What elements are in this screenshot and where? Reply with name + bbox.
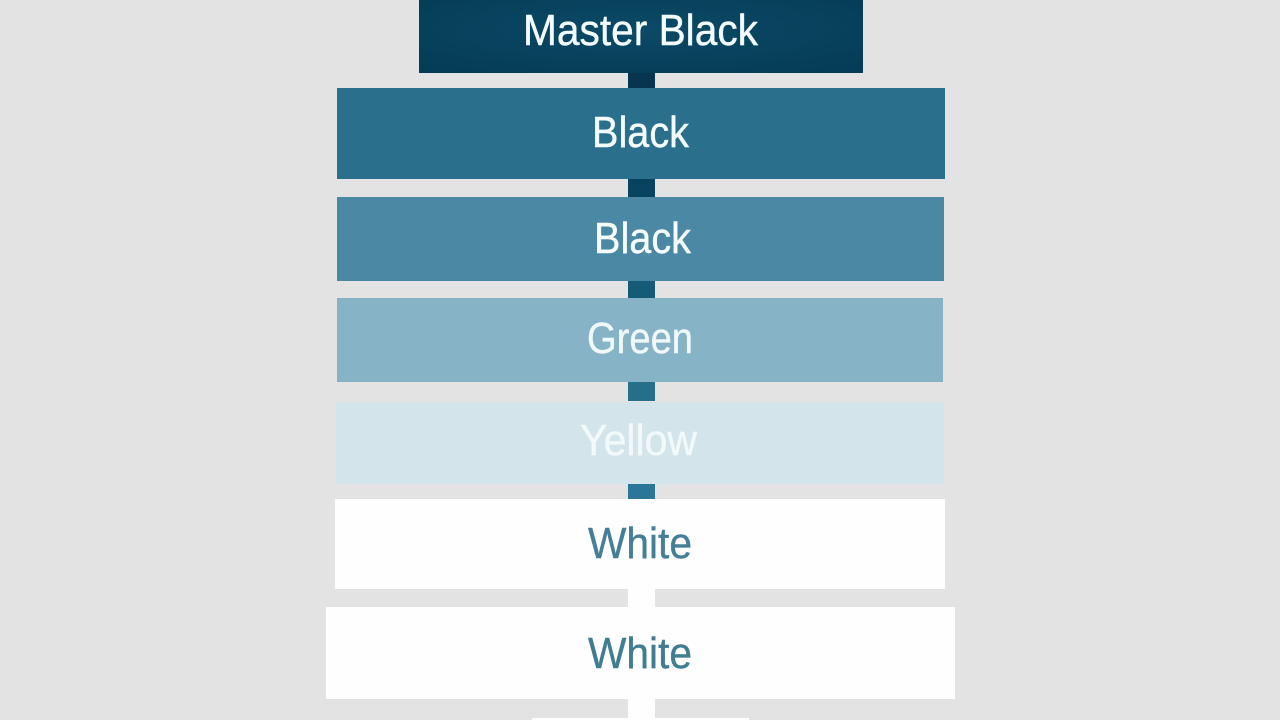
connector: green to yellow [628, 382, 655, 401]
connector: black to black [628, 179, 655, 197]
level: white [335, 499, 945, 589]
level: yellow [336, 402, 944, 484]
connector: white to next level [628, 699, 655, 720]
next level: cropped bar [532, 718, 749, 720]
connector: yellow to white [628, 484, 655, 499]
level: black [337, 88, 945, 179]
level: green: Green [587, 314, 693, 363]
level: master black [419, 0, 863, 73]
level: master black: Master Black [523, 6, 759, 55]
connector: master black to black [628, 73, 655, 88]
level: yellow: Yellow [580, 416, 697, 465]
connector: black to green [628, 281, 655, 298]
level: white [326, 607, 955, 699]
connector: white to white [628, 589, 655, 607]
level: black: Black [592, 108, 690, 157]
level: green [337, 298, 943, 382]
level: white: White [588, 519, 692, 568]
level: black: Black [594, 214, 692, 263]
level: black [337, 197, 944, 281]
level: white: White [588, 629, 692, 678]
